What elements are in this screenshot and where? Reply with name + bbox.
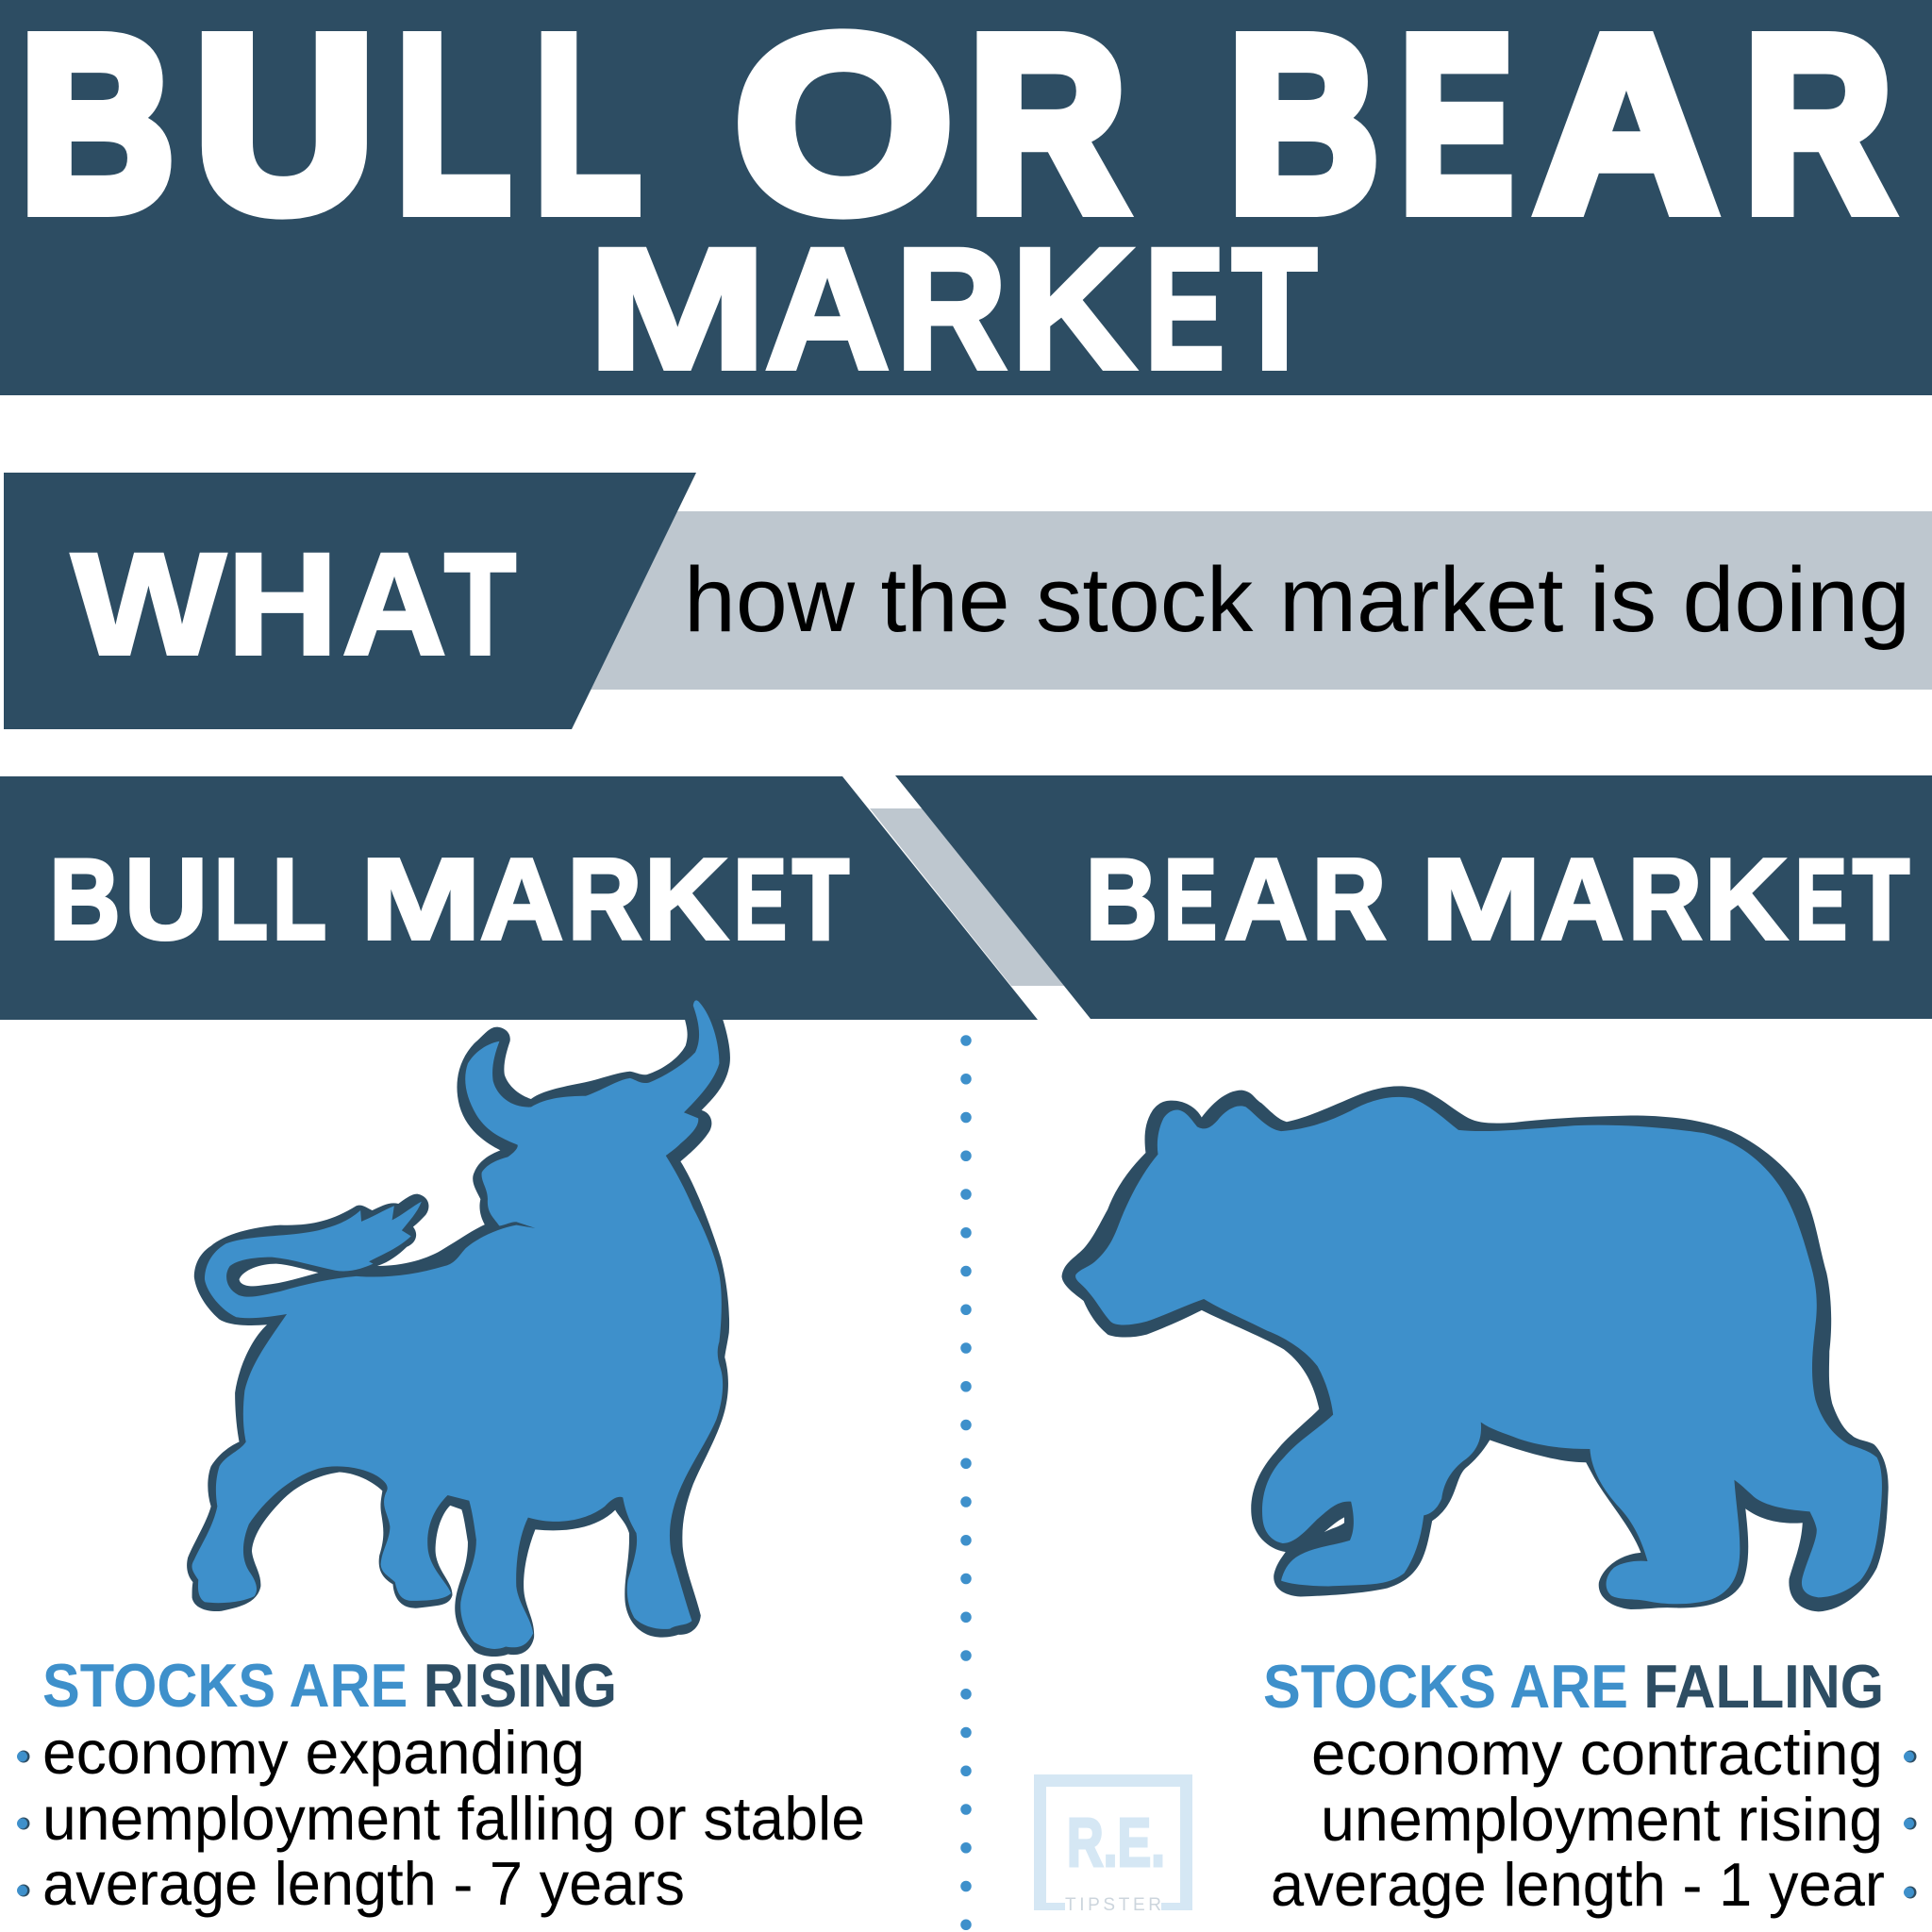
bull bullets bbox=[17, 1751, 30, 1896]
subtitle: MARKET: E bbox=[1145, 212, 1224, 405]
bull bullet list: economy expanding bbox=[42, 1718, 585, 1787]
subtitle: MARKET bbox=[588, 212, 1317, 405]
heading: BULL MARKET: T bbox=[792, 835, 849, 963]
bull bullet list bbox=[42, 1718, 865, 1918]
bear subheading: STOCKS ARE FALLING bbox=[1263, 1652, 1884, 1721]
bear market band bbox=[895, 775, 1932, 1019]
dotted divider bbox=[960, 1041, 972, 1932]
heading: BEAR MARKET: K bbox=[1705, 835, 1787, 963]
bear market text block bbox=[1263, 1652, 1917, 1919]
subtitle: MARKET: T bbox=[1232, 212, 1317, 405]
heading: BULL MARKET: E bbox=[734, 835, 787, 963]
heading: BULL MARKET: L bbox=[273, 835, 326, 963]
heading: BULL MARKET: M bbox=[360, 835, 481, 963]
bull subheading: STOCKS ARE RISING bbox=[42, 1651, 617, 1720]
what band bbox=[4, 473, 1932, 729]
heading: BULL MARKET: R bbox=[568, 835, 641, 963]
subtitle: MARKET: M bbox=[588, 212, 767, 405]
heading: BEAR MARKET: A bbox=[1224, 835, 1307, 963]
heading: WHAT: T bbox=[444, 524, 516, 685]
heading: BULL MARKET: U bbox=[125, 835, 208, 963]
heading: BEAR MARKET: A bbox=[1541, 835, 1624, 963]
heading: BEAR MARKET bbox=[1086, 835, 1909, 963]
subtitle: MARKET: A bbox=[765, 212, 890, 405]
bull market band bbox=[0, 776, 1038, 1020]
heading: BEAR MARKET: E bbox=[1795, 835, 1847, 963]
heading: WHAT: H bbox=[227, 524, 338, 685]
icon: bear bbox=[1062, 1086, 1889, 1611]
heading: BEAR MARKET: R bbox=[1628, 835, 1702, 963]
heading: BULL MARKET: A bbox=[480, 835, 563, 963]
bull market text block bbox=[17, 1651, 865, 1918]
heading: BEAR MARKET: M bbox=[1421, 835, 1541, 963]
subtitle: MARKET: R bbox=[896, 212, 1007, 405]
bear bullet list: average length - 1 year bbox=[1271, 1850, 1885, 1919]
market headers bbox=[0, 775, 1932, 1020]
logo: R.E. Tipster: TIPSTER bbox=[1065, 1895, 1161, 1915]
heading: BULL MARKET: B bbox=[49, 835, 121, 963]
bull bullet list: unemployment falling or stable bbox=[42, 1784, 865, 1853]
heading: BULL MARKET: L bbox=[214, 835, 268, 963]
heading: BEAR MARKET: B bbox=[1086, 835, 1158, 963]
subtitle: MARKET: K bbox=[1011, 212, 1135, 405]
bear bullet list: economy contracting bbox=[1311, 1719, 1883, 1788]
bull bullet list: average length - 7 years bbox=[42, 1849, 685, 1918]
definition text: how the stock market is doing bbox=[684, 548, 1910, 651]
header banner bbox=[0, 0, 1932, 405]
title: BULL OR BEAR bbox=[20, 0, 1892, 262]
heading: BULL MARKET bbox=[49, 835, 849, 963]
bear bullets bbox=[1904, 1751, 1917, 1898]
bear bullet list bbox=[1271, 1719, 1885, 1919]
heading: WHAT: W bbox=[72, 524, 226, 685]
heading: WHAT bbox=[72, 524, 516, 685]
icon: bull bbox=[187, 1000, 730, 1657]
logo: R.E. Tipster: R.E. bbox=[1067, 1806, 1165, 1881]
heading: WHAT: A bbox=[342, 524, 446, 685]
bear bullet list: unemployment rising bbox=[1321, 1785, 1883, 1854]
heading: BULL MARKET: K bbox=[644, 835, 727, 963]
logo: R.E. Tipster bbox=[1034, 1774, 1192, 1915]
heading: BEAR MARKET: E bbox=[1164, 835, 1217, 963]
heading: BEAR MARKET: R bbox=[1312, 835, 1386, 963]
heading: BEAR MARKET: T bbox=[1853, 835, 1909, 963]
